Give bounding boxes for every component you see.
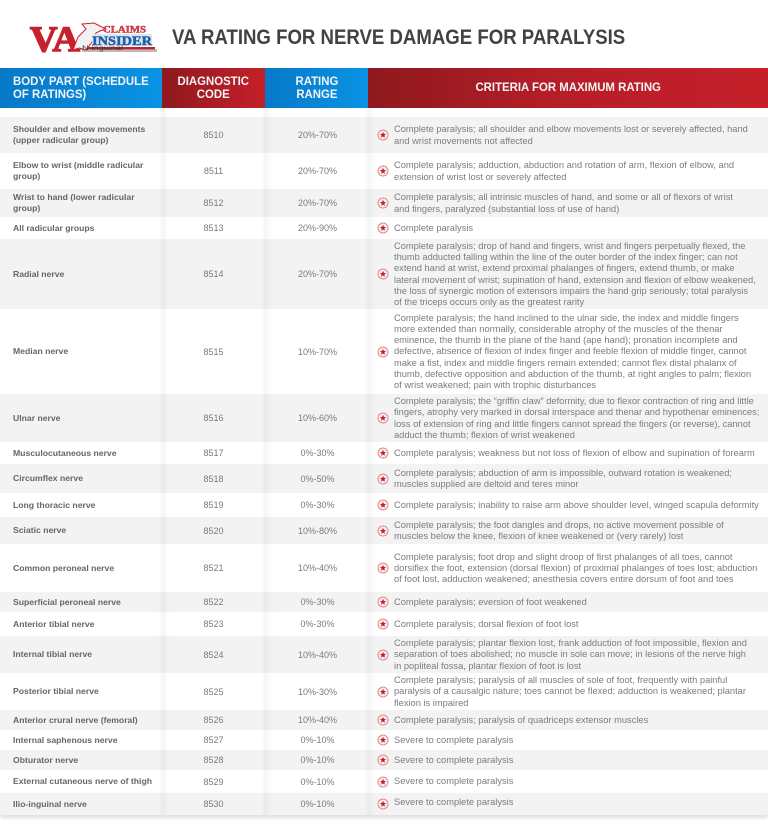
body part: Ilio-inguinal nerve bbox=[13, 799, 87, 809]
code: 8519 bbox=[203, 500, 224, 510]
criteria: Severe to complete paralysis bbox=[394, 735, 513, 745]
criteria: and wrist movements not affected bbox=[394, 136, 533, 146]
body part: group) bbox=[13, 171, 40, 181]
code: 8530 bbox=[203, 799, 224, 809]
criteria: muscles supplied are deltoid and teres minor bbox=[394, 479, 578, 489]
icon: star bbox=[378, 526, 388, 536]
criteria: Complete paralysis; the foot dangles and drops, no active movement possible of bbox=[394, 520, 724, 530]
code: 8513 bbox=[203, 223, 224, 233]
header: diagnostic code: CODE bbox=[197, 87, 230, 101]
row: obturator nerve bbox=[0, 750, 768, 770]
code: 8512 bbox=[203, 198, 224, 208]
body part: Obturator nerve bbox=[13, 755, 78, 765]
range: 0%-30% bbox=[300, 597, 335, 607]
icon: star bbox=[377, 776, 389, 788]
body part: All radicular groups bbox=[13, 223, 94, 233]
code: 8521 bbox=[203, 563, 224, 573]
row: internal tibial nerve bbox=[0, 636, 768, 673]
criteria bbox=[394, 520, 724, 541]
criteria: extend hand at wrist, extend proximal phalanges of fingers, extend thumb, or make bbox=[394, 263, 735, 273]
criteria: Complete paralysis; dorsal flexion of foot lost bbox=[394, 619, 578, 629]
body part: Posterior tibial nerve bbox=[13, 686, 99, 696]
criteria: Complete paralysis; the hand inclined to the ulnar side, the index and middle fingers bbox=[394, 313, 739, 323]
body part: Radial nerve bbox=[13, 269, 64, 279]
range: 10%-60% bbox=[298, 413, 337, 423]
criteria bbox=[394, 313, 751, 390]
criteria: separation of toes abolished; no muscle in sole can move; in lesions of the nerve high bbox=[394, 649, 746, 659]
range: 20%-70% bbox=[298, 166, 337, 176]
criteria: Complete paralysis; adduction, abduction and rotation of arm, flexion of elbow, and bbox=[394, 160, 734, 170]
range: 0%-10% bbox=[300, 799, 335, 809]
criteria: thumb adducted falling within the line of the outer border of the index finger; can not bbox=[394, 252, 738, 262]
body part: Circumflex nerve bbox=[13, 473, 83, 483]
icon: star bbox=[378, 198, 388, 208]
criteria bbox=[394, 396, 759, 440]
criteria: of wrist weakened; pain with trophic disturbances bbox=[394, 380, 596, 390]
code: 8514 bbox=[203, 269, 224, 279]
range: 10%-40% bbox=[298, 715, 337, 725]
criteria: of foot lost, adduction weakened; anesthesia covers entire dorsum of foot and toes bbox=[394, 574, 734, 584]
range: 0%-50% bbox=[300, 474, 335, 484]
icon: star bbox=[378, 412, 388, 424]
range: 20%-70% bbox=[298, 198, 337, 208]
criteria: more extended than normally, considerable atrophy of the muscles of the thenar bbox=[394, 324, 723, 334]
criteria: in popliteal fossa, plantar flexion of foot is lost bbox=[394, 661, 581, 671]
criteria: loss of extension of ring and little fingers cannot spread the fingers (or reverse), cannot bbox=[394, 418, 751, 428]
header: rating range: RANGE bbox=[296, 87, 337, 101]
body part: Shoulder and elbow movements bbox=[13, 124, 145, 134]
criteria: Complete paralysis; foot drop and slight droop of first phalanges of all toes, cannot bbox=[394, 552, 733, 562]
body part: Superficial peroneal nerve bbox=[13, 597, 121, 607]
criteria: Complete paralysis; drop of hand and fingers, wrist and fingers perpetually flexed, the bbox=[394, 241, 745, 251]
icon: star bbox=[378, 686, 388, 698]
logo: VA Claims Insider bbox=[30, 20, 157, 56]
row: elbow to wrist bbox=[13, 160, 734, 182]
icon: star bbox=[377, 734, 389, 746]
criteria: the loss of synergic motion of extensors impairs the hand grip seriously; total paralysis bbox=[394, 286, 748, 296]
icon: star bbox=[378, 500, 388, 510]
icon: star bbox=[378, 714, 388, 726]
icon: star bbox=[378, 130, 388, 140]
row: internal saphenous nerve bbox=[0, 730, 768, 750]
header: body part: BODY PART (SCHEDULE bbox=[13, 74, 149, 88]
header: rating range bbox=[265, 68, 368, 108]
body part: Internal tibial nerve bbox=[13, 649, 92, 659]
criteria bbox=[394, 552, 757, 584]
row: wrist to hand bbox=[0, 189, 768, 217]
row: shoulder and elbow bbox=[0, 117, 768, 153]
body part: Anterior tibial nerve bbox=[13, 619, 94, 629]
criteria: Complete paralysis; paralysis of quadriceps extensor muscles bbox=[394, 715, 648, 725]
header: criteria: CRITERIA FOR MAXIMUM RATING bbox=[475, 80, 661, 94]
icon: star bbox=[378, 474, 388, 484]
criteria: Complete paralysis; all intrinsic muscles of hand, and some or all of flexors of wrist bbox=[394, 192, 733, 202]
row: anterior crural nerve bbox=[0, 710, 768, 730]
body part bbox=[13, 192, 135, 213]
range: 10%-40% bbox=[298, 650, 337, 660]
icon: star bbox=[378, 222, 388, 234]
code: 8522 bbox=[203, 597, 224, 607]
code: 8523 bbox=[203, 619, 224, 629]
icon: star bbox=[378, 650, 388, 660]
criteria: adduct the thumb; flexion of wrist weakened bbox=[394, 430, 575, 440]
criteria: dorsiflex the foot, extension (dorsal flexion) of proximal phalanges of toes lost; abduction bbox=[394, 563, 757, 573]
body part: Anterior crural nerve (femoral) bbox=[13, 715, 138, 725]
criteria: flexion is impaired bbox=[394, 698, 468, 708]
body part: Elbow to wrist (middle radicular bbox=[13, 160, 143, 170]
criteria: Complete paralysis; eversion of foot weakened bbox=[394, 597, 587, 607]
criteria: Complete paralysis bbox=[394, 223, 473, 233]
body part: (upper radicular group) bbox=[13, 135, 108, 145]
body part: Ulnar nerve bbox=[13, 413, 60, 423]
criteria bbox=[394, 638, 747, 671]
criteria: Complete paralysis; inability to raise arm above shoulder level, winged scapula deformity bbox=[394, 500, 759, 510]
range: 0%-10% bbox=[300, 735, 335, 745]
icon: star bbox=[378, 448, 388, 458]
row: sciatic nerve bbox=[0, 517, 768, 544]
criteria: Complete paralysis; plantar flexion lost, frank adduction of foot impossible, flexion and bbox=[394, 638, 747, 648]
header: diagnostic code bbox=[162, 68, 265, 108]
row: all radicular groups bbox=[13, 222, 473, 234]
icon: star bbox=[377, 798, 389, 810]
criteria: Complete paralysis; all shoulder and elbow movements lost or severely affected, hand bbox=[394, 124, 748, 134]
criteria bbox=[394, 124, 748, 146]
range: 20%-70% bbox=[298, 130, 337, 140]
code: 8517 bbox=[203, 448, 224, 458]
range: 10%-30% bbox=[298, 686, 337, 696]
icon: star bbox=[378, 618, 388, 630]
icon: star bbox=[377, 754, 389, 766]
criteria bbox=[394, 160, 734, 182]
criteria: eminence, the thumb in the plane of the hand (ape hand); pronation incomplete and bbox=[394, 335, 738, 345]
header: diagnostic code: DIAGNOSTIC bbox=[178, 74, 249, 88]
row: radial nerve bbox=[0, 239, 768, 309]
criteria: and fingers, paralyzed (substantial loss of use of hand) bbox=[394, 204, 619, 214]
range: 10%-80% bbox=[298, 526, 337, 536]
code: 8528 bbox=[203, 755, 224, 765]
body part bbox=[13, 124, 145, 145]
row: anterior tibial nerve bbox=[13, 618, 578, 630]
criteria: lateral movement of wrist; supination of hand, extension and flexion of elbow weakened, bbox=[394, 274, 756, 284]
icon: star bbox=[378, 562, 388, 574]
code: 8526 bbox=[203, 715, 224, 725]
code: 8524 bbox=[203, 650, 224, 660]
criteria: paralysis of a causalgic nature; toes cannot be flexed; adduction is weakened; plantar bbox=[394, 686, 746, 696]
body part: Internal saphenous nerve bbox=[13, 735, 118, 745]
criteria: muscles below the knee, flexion of knee weakened or (very rarely) lost bbox=[394, 531, 683, 541]
body part: group) bbox=[13, 203, 40, 213]
row: median nerve bbox=[13, 313, 751, 390]
header: body part bbox=[0, 68, 162, 108]
row: musculocutaneous nerve bbox=[13, 448, 755, 458]
body part: Common peroneal nerve bbox=[13, 563, 114, 573]
range: 0%-10% bbox=[300, 776, 335, 786]
row: ilio-inguinal nerve bbox=[0, 793, 768, 815]
code: 8527 bbox=[203, 735, 224, 745]
range: 0%-10% bbox=[300, 755, 335, 765]
row: superficial peroneal nerve bbox=[0, 592, 768, 612]
range: 20%-90% bbox=[298, 223, 337, 233]
title: VA RATING FOR NERVE DAMAGE FOR PARALYSIS bbox=[172, 25, 625, 49]
criteria: Complete paralysis; abduction of arm is impossible, outward rotation is weakened; bbox=[394, 468, 732, 478]
icon: star bbox=[378, 346, 388, 358]
criteria: thumb, defective opposition and abduction of the thumb, at right angles to palm; flexion bbox=[394, 369, 751, 379]
criteria: Severe to complete paralysis bbox=[394, 776, 513, 786]
range: 0%-30% bbox=[300, 619, 335, 629]
header: rating range: RATING bbox=[295, 74, 338, 88]
body part bbox=[13, 160, 144, 181]
body part: Musculocutaneous nerve bbox=[13, 448, 117, 458]
range: 10%-70% bbox=[298, 346, 337, 356]
logo: VA Claims Insider: CLAIMS bbox=[103, 26, 146, 36]
header: criteria bbox=[368, 68, 768, 108]
code: 8529 bbox=[203, 776, 224, 786]
code: 8525 bbox=[203, 686, 224, 696]
icon: star bbox=[378, 268, 388, 280]
criteria: fingers, atrophy very marked in dorsal interspace and thenar and hypothenar eminences; bbox=[394, 407, 759, 417]
icon: star bbox=[378, 596, 388, 608]
code: 8511 bbox=[204, 166, 223, 176]
criteria: extension of wrist lost or severely affected bbox=[394, 172, 566, 182]
row: long thoracic nerve bbox=[13, 500, 759, 510]
criteria: make a fist, index and middle fingers remain extended; cannot flex distal phalanx of bbox=[394, 358, 737, 368]
row: ulnar nerve bbox=[0, 394, 768, 442]
logo: VA Claims Insider: INSIDER bbox=[92, 33, 153, 48]
criteria bbox=[394, 241, 756, 307]
code: 8520 bbox=[203, 526, 224, 536]
criteria: Severe to complete paralysis bbox=[394, 797, 513, 807]
row: external cutaneous nerve of thigh bbox=[0, 770, 768, 793]
criteria: defective, absence of flexion of index finger and feeble flexion of middle finger, cannot bbox=[394, 346, 746, 356]
range: 0%-30% bbox=[300, 448, 335, 458]
icon: star bbox=[378, 166, 388, 176]
code: 8516 bbox=[203, 413, 224, 423]
criteria: Complete paralysis; paralysis of all muscles of sole of foot, frequently with painful bbox=[394, 675, 727, 685]
criteria: Complete paralysis; weakness but not loss of flexion of elbow and supination of forearm bbox=[394, 448, 755, 458]
logo: VA Claims Insider: N-inguinal bbox=[82, 46, 123, 52]
row: common peroneal nerve bbox=[13, 552, 757, 584]
code: 8510 bbox=[203, 130, 224, 140]
header: body part: OF RATINGS) bbox=[13, 87, 86, 101]
criteria bbox=[394, 675, 746, 708]
code: 8515 bbox=[203, 346, 224, 356]
criteria bbox=[394, 192, 733, 214]
criteria: of the triceps occurs only as the greatest rarity bbox=[394, 297, 584, 307]
body part: External cutaneous nerve of thigh bbox=[13, 776, 152, 786]
body part: Median nerve bbox=[13, 346, 68, 356]
criteria: Severe to complete paralysis bbox=[394, 755, 513, 765]
range: 0%-30% bbox=[300, 500, 335, 510]
row: circumflex nerve bbox=[0, 464, 768, 493]
body part: Sciatic nerve bbox=[13, 525, 66, 535]
body part: Wrist to hand (lower radicular bbox=[13, 192, 135, 202]
range: 10%-40% bbox=[298, 563, 337, 573]
code: 8518 bbox=[203, 474, 224, 484]
range: 20%-70% bbox=[298, 269, 337, 279]
criteria bbox=[394, 468, 732, 489]
row: posterior tibial nerve bbox=[13, 675, 746, 708]
criteria: Complete paralysis; the “griffin claw” deformity, due to flexor contraction of ring and little bbox=[394, 396, 754, 406]
body part: Long thoracic nerve bbox=[13, 500, 95, 510]
